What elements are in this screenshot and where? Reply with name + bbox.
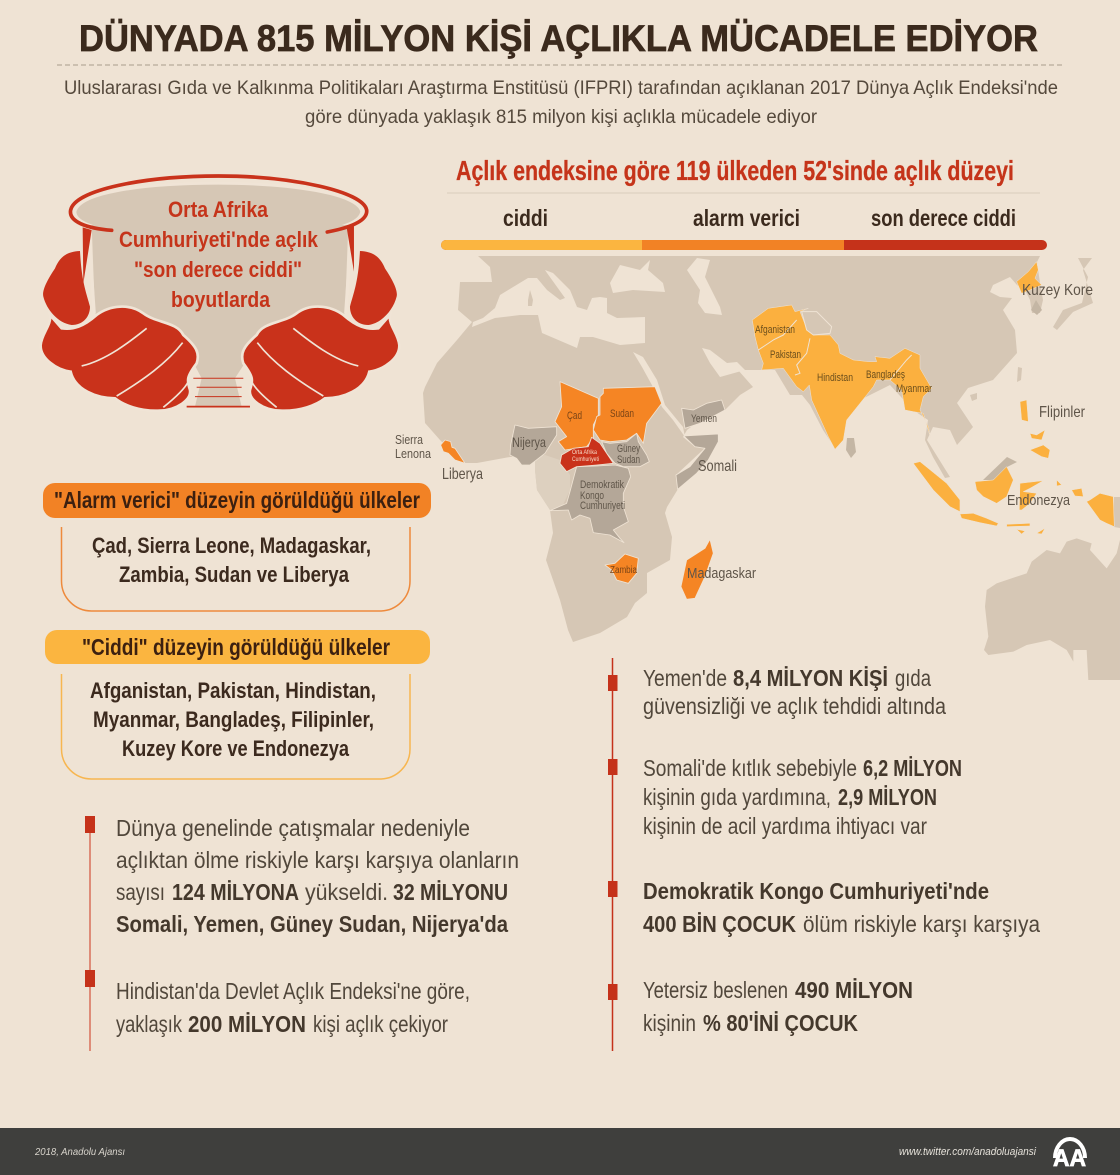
country: Somalia [676, 434, 718, 489]
panel: serious level countries [45, 630, 430, 779]
label: Central African Republic: Orta Afrika [572, 450, 598, 456]
country: Chad [555, 382, 598, 450]
label: DR Congo: Cumhuriyeti [580, 500, 625, 512]
label: Chad: Çad [567, 410, 582, 422]
alarm country list: Zambia, Sudan ve Liberya [119, 562, 350, 587]
fact: India: Hindistan'da Devlet Açlık Endeksi'ne göre, [116, 978, 470, 1004]
country: South Sudan [602, 433, 649, 467]
timeline right [608, 658, 618, 1051]
serious country list: Myanmar, Bangladeş, Filipinler, [93, 707, 374, 732]
fact: Somalia: kişinin de acil yardıma ihtiyacı var [643, 813, 927, 839]
label: Indonesia: Endonezya [1007, 492, 1071, 509]
fact: conflict: 32 MİLYONU [393, 879, 508, 905]
bowl text: "son derece ciddi" [134, 257, 302, 282]
label: Somalia: Somali [698, 458, 737, 475]
bowl rim fill [75, 183, 362, 230]
bowl text: boyutlarda [171, 287, 271, 312]
world map [395, 256, 1120, 680]
label: Sierra Leone: Sierra [395, 432, 424, 447]
land masses [423, 256, 1120, 680]
bowl text [119, 197, 319, 312]
label: North Korea: Kuzey Kore [1022, 282, 1093, 299]
islands: Philippines [1020, 400, 1050, 458]
islands: Sumatra and Java [913, 462, 1045, 534]
footer [0, 1128, 1120, 1175]
alarm heading pill: "Alarm verici" düzeyin görüldüğü ülkeler [54, 487, 420, 513]
bowl wedges [83, 225, 354, 283]
alarm country frame [62, 527, 410, 611]
fact: conflict: Dünya genelinde çatışmalar nedeniyle [116, 815, 470, 841]
social link: www.twitter.com/anadoluajansi [899, 1146, 1037, 1158]
label: India: Hindistan [817, 372, 853, 384]
fact: Yemen: gıda [895, 665, 931, 691]
bowl base [187, 378, 250, 407]
legend labels: son derece ciddi [871, 205, 1016, 231]
title: DÜNYADA 815 MİLYON KİŞİ AÇLIKLA MÜCADELE EDİYOR [79, 18, 1038, 59]
islands: Borneo and Sulawesi [975, 467, 1062, 510]
country: Central African Republic [560, 437, 613, 472]
bowl text: Cumhuriyeti'nde açlık [119, 227, 319, 252]
fact: India: kişi açlık çekiyor [313, 1011, 448, 1037]
icon: bowl held in hands [41, 176, 399, 411]
islands: Papua [1072, 488, 1114, 527]
legend bar [441, 240, 1047, 250]
fact: Somalia: Somali'de kıtlık sebebiyle [643, 755, 857, 781]
alarm country list [92, 533, 371, 587]
borders between Asian countries [758, 320, 912, 380]
alarm country list: Çad, Sierra Leone, Madagaskar, [92, 533, 371, 558]
fact: Somalia: kişinin gıda yardımına, [643, 784, 831, 810]
African countries [441, 382, 725, 599]
timeline left [85, 816, 95, 1051]
country: Nigeria [510, 425, 557, 465]
label: Sierra Leone: Lenona [395, 446, 432, 461]
fact: India: 200 MİLYON [188, 1011, 306, 1037]
fact: undernourished: Yetersiz beslenen [643, 977, 788, 1003]
country: Sudan [593, 387, 662, 443]
fact: undernourished: % 80'İNİ ÇOCUK [703, 1010, 858, 1036]
label: Bangladesh: Bangladeş [866, 369, 905, 381]
subtitle text: göre dünyada yaklaşık 815 milyon kişi açlıkla mücadele ediyor [305, 107, 818, 128]
countries: Afghanistan, Pakistan, India, Bangladesh, Myanmar [752, 305, 932, 449]
serious country list [90, 678, 376, 761]
panel: alarm level countries [43, 483, 431, 611]
fact: conflict: 124 MİLYONA [172, 879, 299, 905]
label: DR Congo [580, 479, 625, 512]
copyright: 2018, Anadolu Ajansı [34, 1147, 125, 1158]
label: Afghanistan: Afganistan [755, 324, 795, 336]
legend labels [503, 205, 1016, 231]
serious country frame [62, 674, 410, 779]
subtitle text [64, 78, 1058, 128]
serious country list: Kuzey Kore ve Endonezya [122, 736, 350, 761]
map labels [395, 282, 1093, 582]
left rear hand [43, 251, 90, 325]
label: Sierra Leone [395, 432, 432, 461]
panel: right facts [608, 658, 1040, 1051]
label: Central African Republic: Cumhuriyeti [572, 457, 599, 463]
serious country list: Afganistan, Pakistan, Hindistan, [90, 678, 376, 703]
fact: Yemen [643, 665, 946, 719]
bowl body [92, 225, 348, 378]
fact: India [116, 978, 470, 1037]
fact: conflict: sayısı [116, 879, 165, 905]
label: South Sudan: Sudan [617, 454, 640, 466]
fact: DR Congo: Demokratik Kongo Cumhuriyeti'nde [643, 878, 989, 904]
fact: Yemen: Yemen'de [643, 665, 727, 691]
label: Philippines: Flipinler [1039, 404, 1086, 421]
country: DR Congo [550, 465, 631, 543]
fact: Yemen: 8,4 MİLYON KİŞİ [733, 665, 888, 691]
subtitle text: Uluslararası Gıda ve Kalkınma Politikaları Araştırma Enstitüsü (IFPRI) tarafından açıklanan 2017 Dünya Açlık Endeksi'nde [64, 78, 1058, 99]
fact: DR Congo: ölüm riskiyle karşı karşıya [803, 911, 1040, 937]
fact: conflict: yükseldi. [305, 879, 388, 905]
alarm heading pill [43, 483, 431, 518]
seas [472, 258, 745, 437]
country: Sierra Leone and Liberia [441, 440, 465, 463]
label: Liberia: Liberya [442, 466, 483, 483]
legend labels: ciddi [503, 205, 548, 231]
country: Madagascar [681, 539, 713, 599]
left front hand [41, 307, 198, 411]
label: Yemen: Yemen [691, 413, 717, 425]
bowl text: Orta Afrika [168, 197, 269, 222]
bowl rim [70, 176, 367, 232]
label: Nigeria: Nijerya [512, 434, 546, 450]
fact: DR Congo [643, 878, 1040, 937]
label: Zimbabwe shape: Zambia [610, 565, 637, 576]
fact: conflict [116, 815, 519, 937]
fact: undernourished: kişinin [643, 1010, 696, 1036]
country: North Korea [1017, 262, 1042, 293]
fact: DR Congo: 400 BİN ÇOCUK [643, 911, 796, 937]
fact: undernourished: 490 MİLYON [795, 977, 913, 1003]
fact: India: yaklaşık [116, 1011, 182, 1037]
label: Myanmar: Myanmar [896, 383, 932, 395]
label: Madagascar: Madagaskar [687, 565, 756, 582]
label: South Sudan [617, 443, 640, 466]
country: Kashmir [802, 312, 832, 335]
serious heading pill [45, 630, 430, 664]
fact: Somalia [643, 755, 962, 839]
label: Sudan: Sudan [610, 408, 634, 420]
fact: conflict: açlıktan ölme riskiyle karşı karşıya olanların [116, 847, 519, 873]
right rear hand [350, 251, 397, 325]
label: DR Congo: Kongo [580, 490, 604, 502]
country: Zimbabwe shape [605, 554, 638, 583]
fact: conflict: Somali, Yemen, Güney Sudan, Nijerya'da [116, 911, 508, 937]
country: Yemen [682, 400, 725, 428]
legend labels: alarm verici [693, 205, 800, 231]
bowl side highlights [89, 230, 351, 313]
South and Southeast Asian countries [752, 262, 1114, 534]
fact: Yemen: güvensizliği ve açlık tehdidi altında [643, 693, 946, 719]
label: South Sudan: Güney [617, 443, 640, 455]
label: Central African Republic [572, 450, 599, 463]
label: Pakistan: Pakistan [770, 349, 801, 361]
fact: Somalia: 2,9 MİLYON [838, 784, 937, 810]
fact: Somalia: 6,2 MİLYON [863, 755, 962, 781]
panel: left facts [85, 815, 519, 1051]
icon: agency logo: AA [1053, 1145, 1086, 1172]
right front hand [242, 307, 399, 411]
serious heading pill: "Ciddi" düzeyin görüldüğü ülkeler [82, 634, 390, 660]
fact: undernourished [643, 977, 913, 1036]
label: DR Congo: Demokratik [580, 479, 624, 491]
